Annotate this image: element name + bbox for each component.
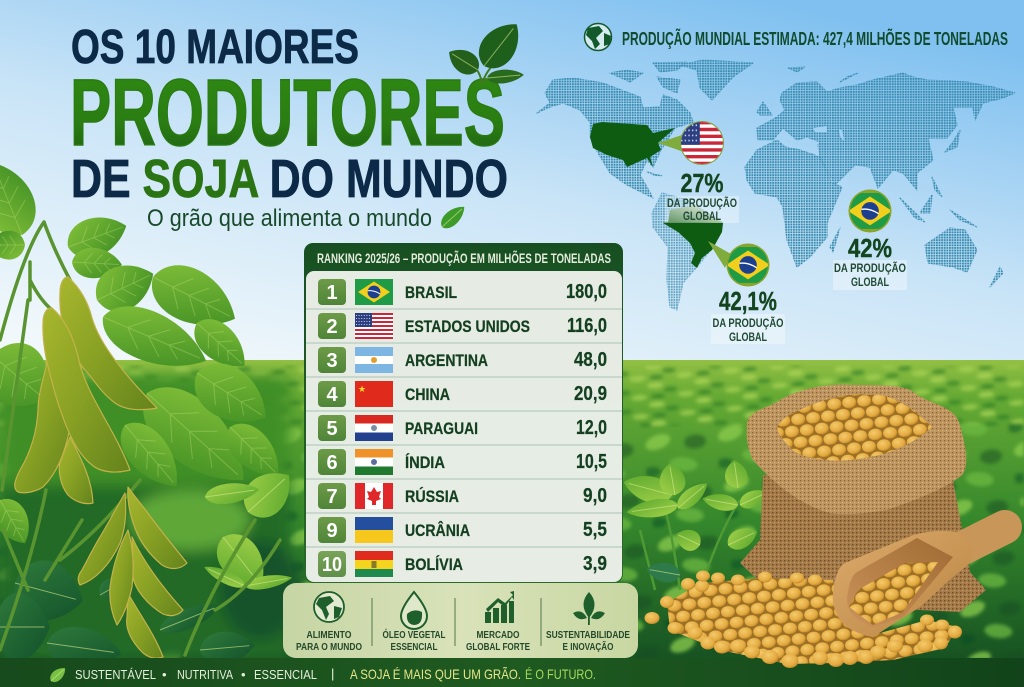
panel: benefits strip (283, 583, 638, 658)
row 5 Paraguai: 5 (326, 418, 338, 440)
icon: globe (314, 592, 344, 622)
row 3 Argentina: 48,0 (574, 349, 607, 371)
footer bar: É O FUTURO. (525, 666, 596, 682)
row 2 Estados Unidos: ESTADOS UNIDOS (405, 317, 530, 336)
benefit: global market: GLOBAL FORTE (466, 641, 530, 653)
footer bar: NUTRITIVA (177, 667, 233, 682)
subtitle: O grão que alimenta o mundo (147, 205, 432, 232)
row 10 Bolívia: 3,9 (583, 553, 607, 575)
row 4 China: 4 (326, 384, 338, 406)
footer bar: SUSTENTÁVEL (75, 667, 156, 682)
callout: USA 27%: GLOBAL (683, 209, 721, 223)
row 7 Rússia (318, 483, 607, 509)
footer bar: A SOJA É MAIS QUE UM GRÃO. (350, 666, 521, 682)
icon: globe (584, 24, 612, 50)
title: OS 10 MAIORES (71, 21, 359, 74)
row 4 China (318, 381, 607, 407)
row 7 Rússia: 7 (326, 486, 338, 508)
callout: Brazil 42%: DA PRODUÇÃO (834, 260, 906, 275)
icon: oil drop (401, 592, 427, 629)
footer bar: | (331, 666, 334, 681)
icon: sprout (573, 592, 605, 625)
row 3 Argentina (318, 347, 607, 373)
benefit: food for the world: ALIMENTO (306, 629, 352, 641)
row 9 Ucrânia (318, 517, 607, 543)
benefit: global market (466, 591, 530, 653)
title: PRODUTORES (70, 60, 505, 166)
row 9 Ucrânia: 9 (326, 520, 338, 542)
row 4 China: CHINA (405, 385, 450, 404)
row 1 Brasil (318, 279, 607, 305)
benefit: food for the world (296, 592, 362, 653)
row 1 Brasil: 180,0 (566, 281, 607, 303)
callout: Brazil 42%: 42% (848, 233, 892, 263)
row 6 Índia: ÍNDIA (405, 453, 445, 472)
row 5 Paraguai: PARAGUAI (405, 419, 478, 438)
callout: Brazil 42% (833, 190, 907, 290)
row 4 China: ★ (358, 384, 366, 394)
footer bar: • (162, 667, 167, 682)
map highlight: USA (590, 122, 675, 167)
map highlight: Brazil (663, 205, 723, 268)
illustration: soybean plant with pods (0, 153, 302, 673)
row 6 Índia: 6 (326, 452, 338, 474)
footer bar: • (241, 667, 246, 682)
footer bar (0, 658, 1024, 687)
icon: growth chart (485, 591, 514, 623)
row 2 Estados Unidos (318, 313, 607, 339)
world production header (584, 24, 1008, 50)
illustration: seedlings (620, 459, 771, 590)
background: soybean field (0, 360, 1024, 660)
benefit: global market: MERCADO (476, 629, 520, 641)
row 10 Bolívia (318, 551, 607, 577)
row 9 Ucrânia: 5,5 (583, 519, 607, 541)
callout: Brazil 42,1%: DA PRODUÇÃO (712, 315, 784, 330)
row 1 Brasil: BRASIL (405, 283, 457, 302)
row 9 Ucrânia: UCRÂNIA (405, 521, 470, 540)
icon: footer leaf (47, 664, 69, 685)
row 2 Estados Unidos: 2 (326, 316, 338, 338)
benefit: sustainability: SUSTENTABILIDADE (546, 629, 630, 641)
row 5 Paraguai (318, 415, 607, 441)
callout: Brazil 42,1%: GLOBAL (729, 330, 767, 344)
row 10 Bolívia: 10 (322, 554, 342, 576)
row 2 Estados Unidos: 116,0 (567, 315, 607, 337)
benefit: vegetable oil (382, 592, 446, 653)
panel: ranking table (304, 243, 623, 583)
row 7 Rússia: 9,0 (583, 485, 607, 507)
row 10 Bolívia: BOLÍVIA (405, 555, 463, 574)
illustration: burlap sack of soybeans (740, 385, 986, 612)
callout: Brazil 42%: GLOBAL (851, 275, 889, 289)
title (70, 21, 508, 209)
callout: USA 27%: DA PRODUÇÃO (667, 195, 737, 210)
footer bar: ESSENCIAL (254, 667, 317, 682)
callout: USA 27% (658, 121, 739, 223)
table heading: RANKING 2025/26 – PRODUÇÃO EM MILHÕES DE TONELADAS (317, 251, 611, 266)
row 1 Brasil: 1 (326, 282, 338, 304)
row 4 China: 20,9 (574, 383, 607, 405)
row 6 Índia: 10,5 (576, 451, 607, 473)
callout: Brazil 42,1%: 42,1% (719, 286, 777, 316)
row 3 Argentina: ARGENTINA (405, 351, 488, 370)
benefit: sustainability: E INOVAÇÃO (562, 640, 614, 653)
illustration: spilled soybeans (644, 570, 962, 668)
row 5 Paraguai: 12,0 (576, 417, 607, 439)
illustration: wooden scoop (833, 527, 1005, 637)
benefit: sustainability (546, 592, 630, 653)
callout: Brazil 42,1% (708, 241, 785, 344)
background: sky (0, 0, 1024, 362)
icon: title leaves (443, 14, 530, 85)
title: DE SOJA DO MUNDO (71, 149, 508, 209)
row 6 Índia (318, 449, 607, 475)
benefit: vegetable oil: ESSENCIAL (390, 641, 438, 653)
callout: USA 27%: 27% (680, 168, 724, 198)
world map (537, 60, 1015, 310)
row 3 Argentina: 3 (326, 350, 338, 372)
benefit: food for the world: PARA O MUNDO (296, 641, 362, 653)
row 7 Rússia: RÚSSIA (405, 487, 459, 506)
benefit: vegetable oil: ÓLEO VEGETAL (382, 628, 446, 641)
